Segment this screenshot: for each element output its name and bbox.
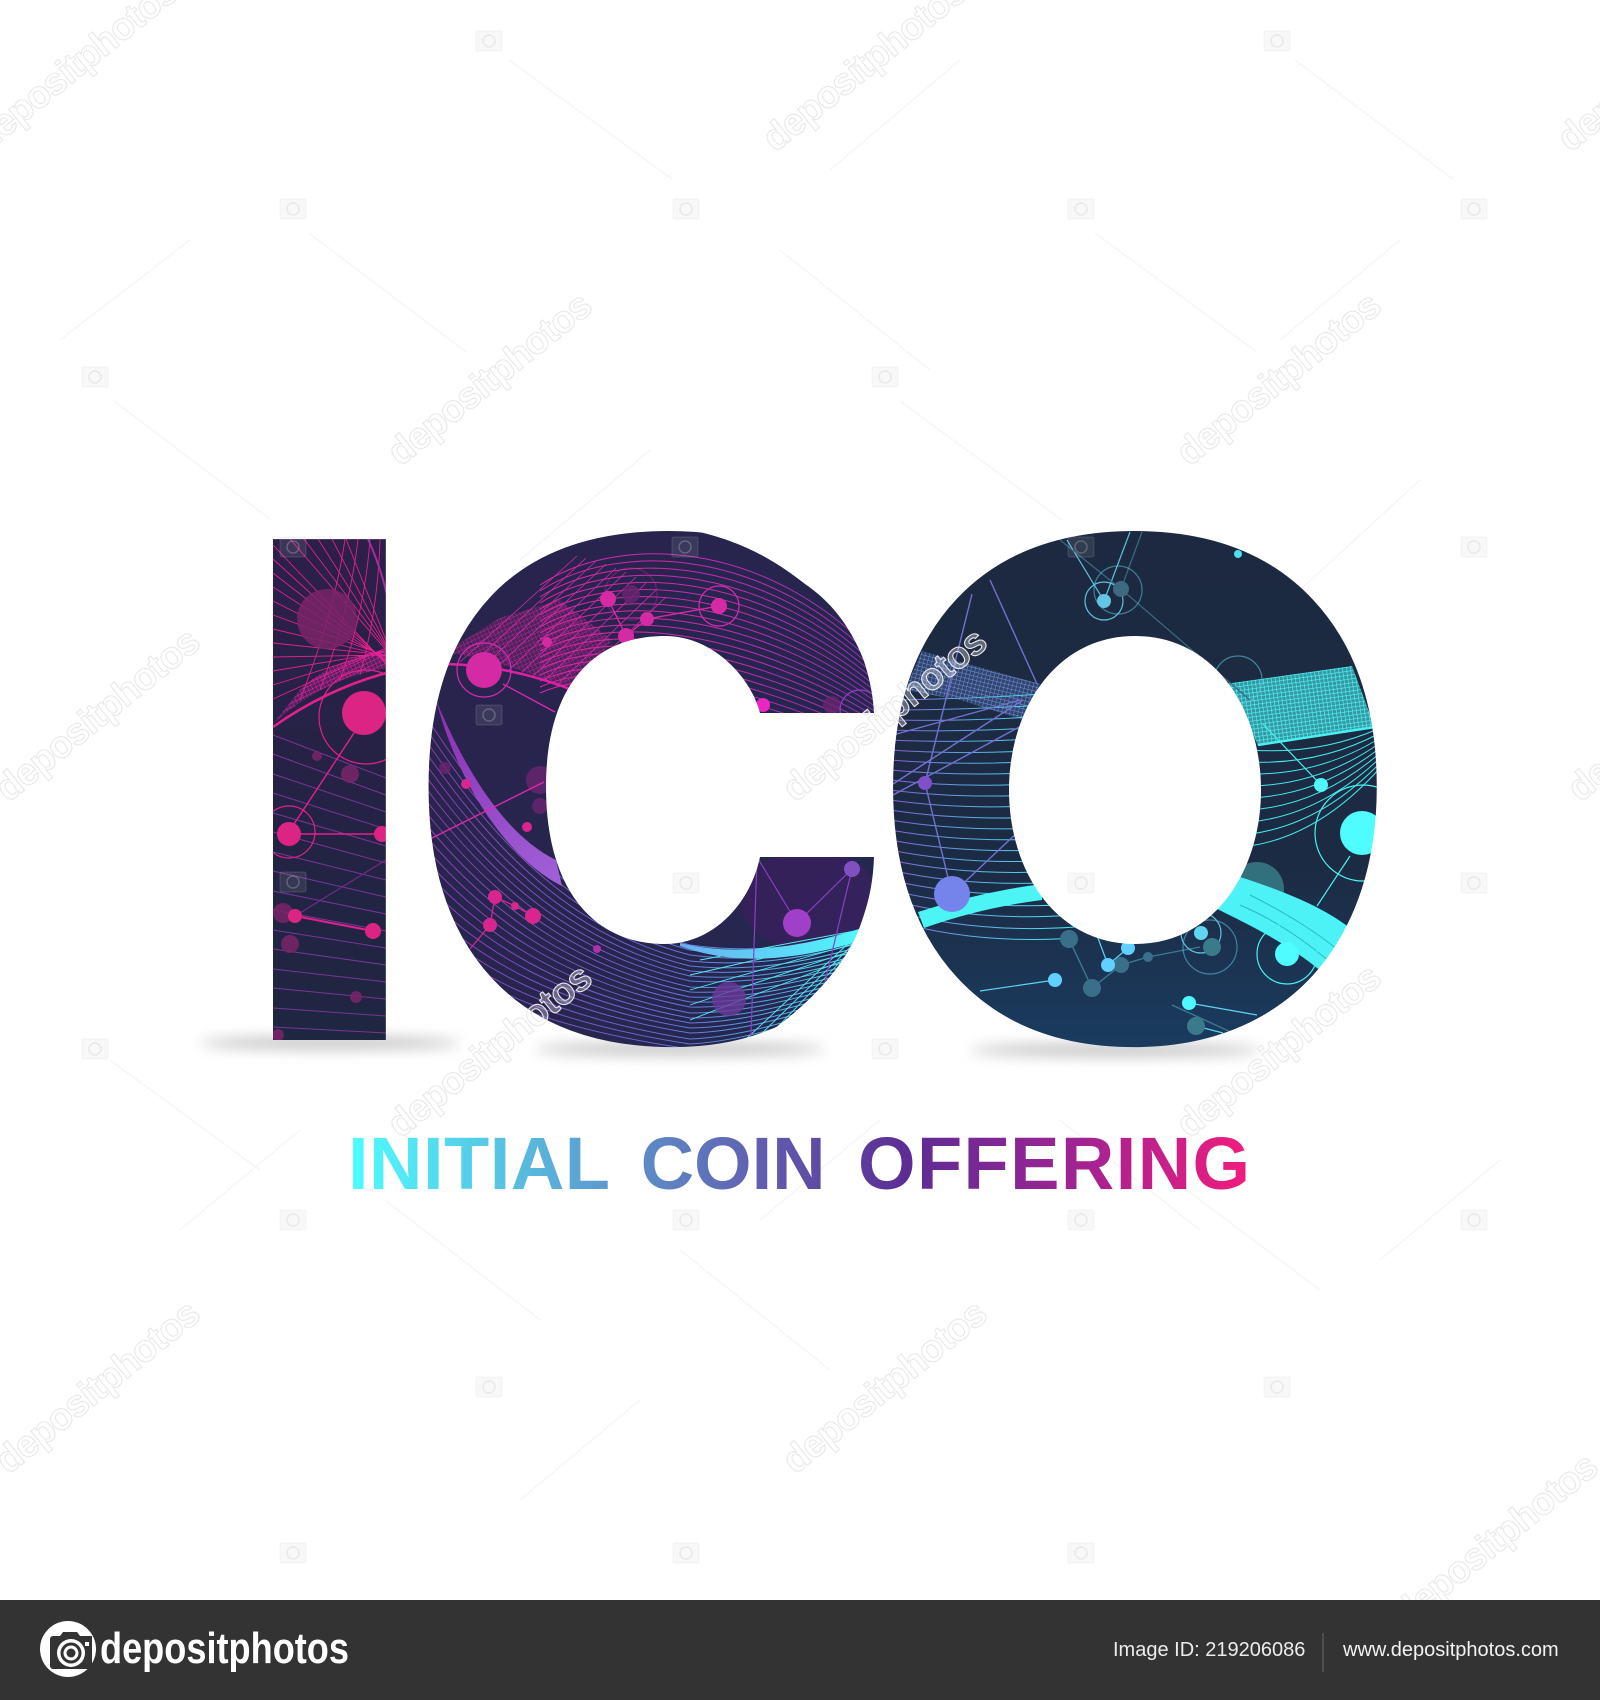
right mesh edge xyxy=(1258,727,1375,745)
purple ribbon xyxy=(436,700,562,886)
nodes xyxy=(918,550,1384,1035)
right mesh band xyxy=(1225,666,1375,746)
left mesh band xyxy=(905,651,1040,722)
rings xyxy=(1085,566,1411,984)
top arc lines xyxy=(540,553,874,713)
faded circles xyxy=(439,585,841,1016)
right faded circle xyxy=(1240,862,1284,892)
watermark cameras xyxy=(82,31,1487,1563)
faded purple patch xyxy=(740,857,872,946)
watermark text: depositphotos xyxy=(1386,1445,1600,1635)
purple lower lines xyxy=(273,735,386,1033)
tagline: OFFERING xyxy=(858,1122,1252,1205)
letter I xyxy=(273,539,386,1040)
cyan mesh xyxy=(690,930,856,1038)
pink mesh band xyxy=(273,650,386,724)
tagline: INITIAL xyxy=(348,1122,610,1205)
purple top-right curve xyxy=(367,539,386,596)
ribbon stripes xyxy=(1240,895,1338,962)
watermark text: depositphotos xyxy=(1169,284,1389,474)
pink line fan xyxy=(273,539,386,700)
logo wordmark: depositphotos xyxy=(100,1624,349,1673)
left bowl lines xyxy=(890,692,1075,940)
tagline: COIN xyxy=(641,1122,826,1205)
right cyan ribbon xyxy=(1215,877,1350,972)
nodes xyxy=(461,591,860,953)
pink band edge xyxy=(273,673,386,727)
right lower fan xyxy=(1250,728,1380,846)
pink mesh edge xyxy=(445,664,575,691)
left cyan ribbon xyxy=(918,884,1042,928)
faded circles xyxy=(272,589,362,1041)
letter C xyxy=(420,525,885,1055)
pink mesh diagonals xyxy=(460,556,666,690)
node links xyxy=(294,732,374,835)
letter ground shadows xyxy=(200,1037,1260,1056)
image id: Image ID: 219206086 xyxy=(1113,1639,1305,1661)
watermark text: depositphotos xyxy=(380,284,600,474)
watermark text: depositphotos xyxy=(775,620,995,810)
node links xyxy=(432,599,719,838)
nodes xyxy=(277,691,390,939)
watermark text: depositphotos xyxy=(380,956,600,1146)
watermark text: depositphotos xyxy=(1169,956,1389,1146)
top node links xyxy=(1067,532,1130,601)
icon: camera logo xyxy=(40,1621,96,1677)
node rings xyxy=(273,669,386,859)
bottom bowl lines xyxy=(428,726,852,1048)
website: www.depositphotos.com xyxy=(1342,1639,1559,1661)
lower node links xyxy=(1072,946,1230,1032)
cyan ribbon xyxy=(680,928,862,959)
pink mesh band xyxy=(445,600,612,692)
faint watermark diagonal lines xyxy=(60,60,1500,1500)
letter O xyxy=(893,531,1377,1048)
node rings xyxy=(456,567,872,713)
right node links xyxy=(1263,724,1350,906)
watermark text: depositphotos xyxy=(775,1292,995,1482)
footer divider xyxy=(1322,1633,1324,1672)
left node links xyxy=(893,580,1037,894)
footer bar xyxy=(0,1600,1600,1700)
